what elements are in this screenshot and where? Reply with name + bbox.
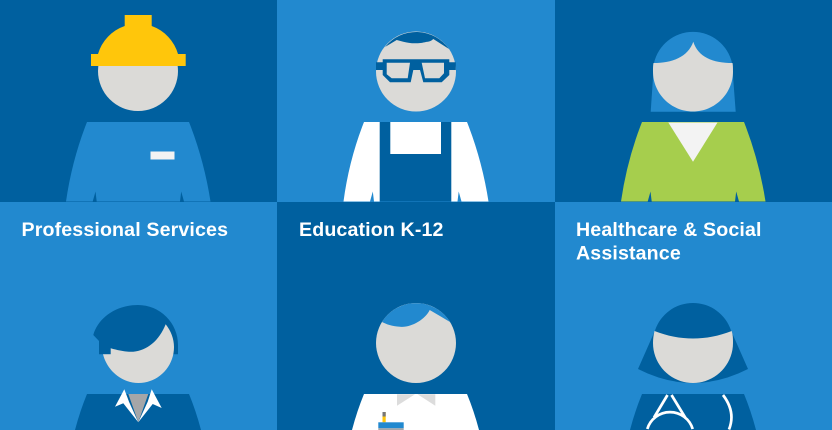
icon: hair back	[93, 305, 178, 354]
panel: professional services	[0, 202, 277, 430]
icon: green sweater	[621, 122, 766, 202]
heading: healthcare and social assistance: Assistance	[576, 242, 681, 264]
icon: worker head with hair	[376, 32, 456, 112]
icon: white v-neck	[668, 122, 718, 162]
icon: teacher coat	[352, 394, 479, 430]
icon: stethoscope	[647, 395, 731, 430]
panel: construction worker	[0, 0, 277, 202]
icon: nurse head	[653, 331, 733, 383]
icon: coat slits	[370, 192, 462, 202]
panel: healthcare and social assistance	[555, 202, 832, 430]
icon: safety goggles	[376, 59, 456, 82]
icon: name tag	[150, 152, 174, 160]
icon: teacher head	[376, 303, 456, 383]
icon: sleeve slits	[93, 192, 184, 202]
icon: grey shirt	[128, 394, 148, 422]
icon: woman head	[653, 42, 733, 112]
heading: professional services: Professional Services	[22, 219, 228, 241]
icon: worker body	[66, 122, 210, 202]
icon: worker head	[98, 31, 178, 111]
icon: teacher hair	[382, 303, 450, 327]
icon: nurse hair	[638, 303, 748, 383]
icon: bow tie	[397, 394, 435, 406]
heading: healthcare and social assistance: Healthcare & Social	[576, 219, 762, 241]
heading: education k-12: Education K-12	[299, 219, 444, 241]
icon: hard hat	[91, 15, 186, 66]
panel: retail worker	[555, 0, 832, 202]
icon: white coat	[344, 122, 488, 202]
icon: nurse scrubs	[630, 394, 756, 430]
panel: manufacturing worker	[277, 0, 555, 202]
icon: sweater slits	[648, 192, 739, 202]
icon: overalls	[380, 122, 451, 202]
icon: long hair	[651, 32, 736, 112]
icon: white collar	[115, 389, 162, 422]
icon: pocket with pencil	[378, 412, 404, 430]
panel: education k-12	[277, 202, 555, 430]
icon: suit jacket	[75, 394, 201, 430]
icon: man head	[103, 324, 174, 383]
